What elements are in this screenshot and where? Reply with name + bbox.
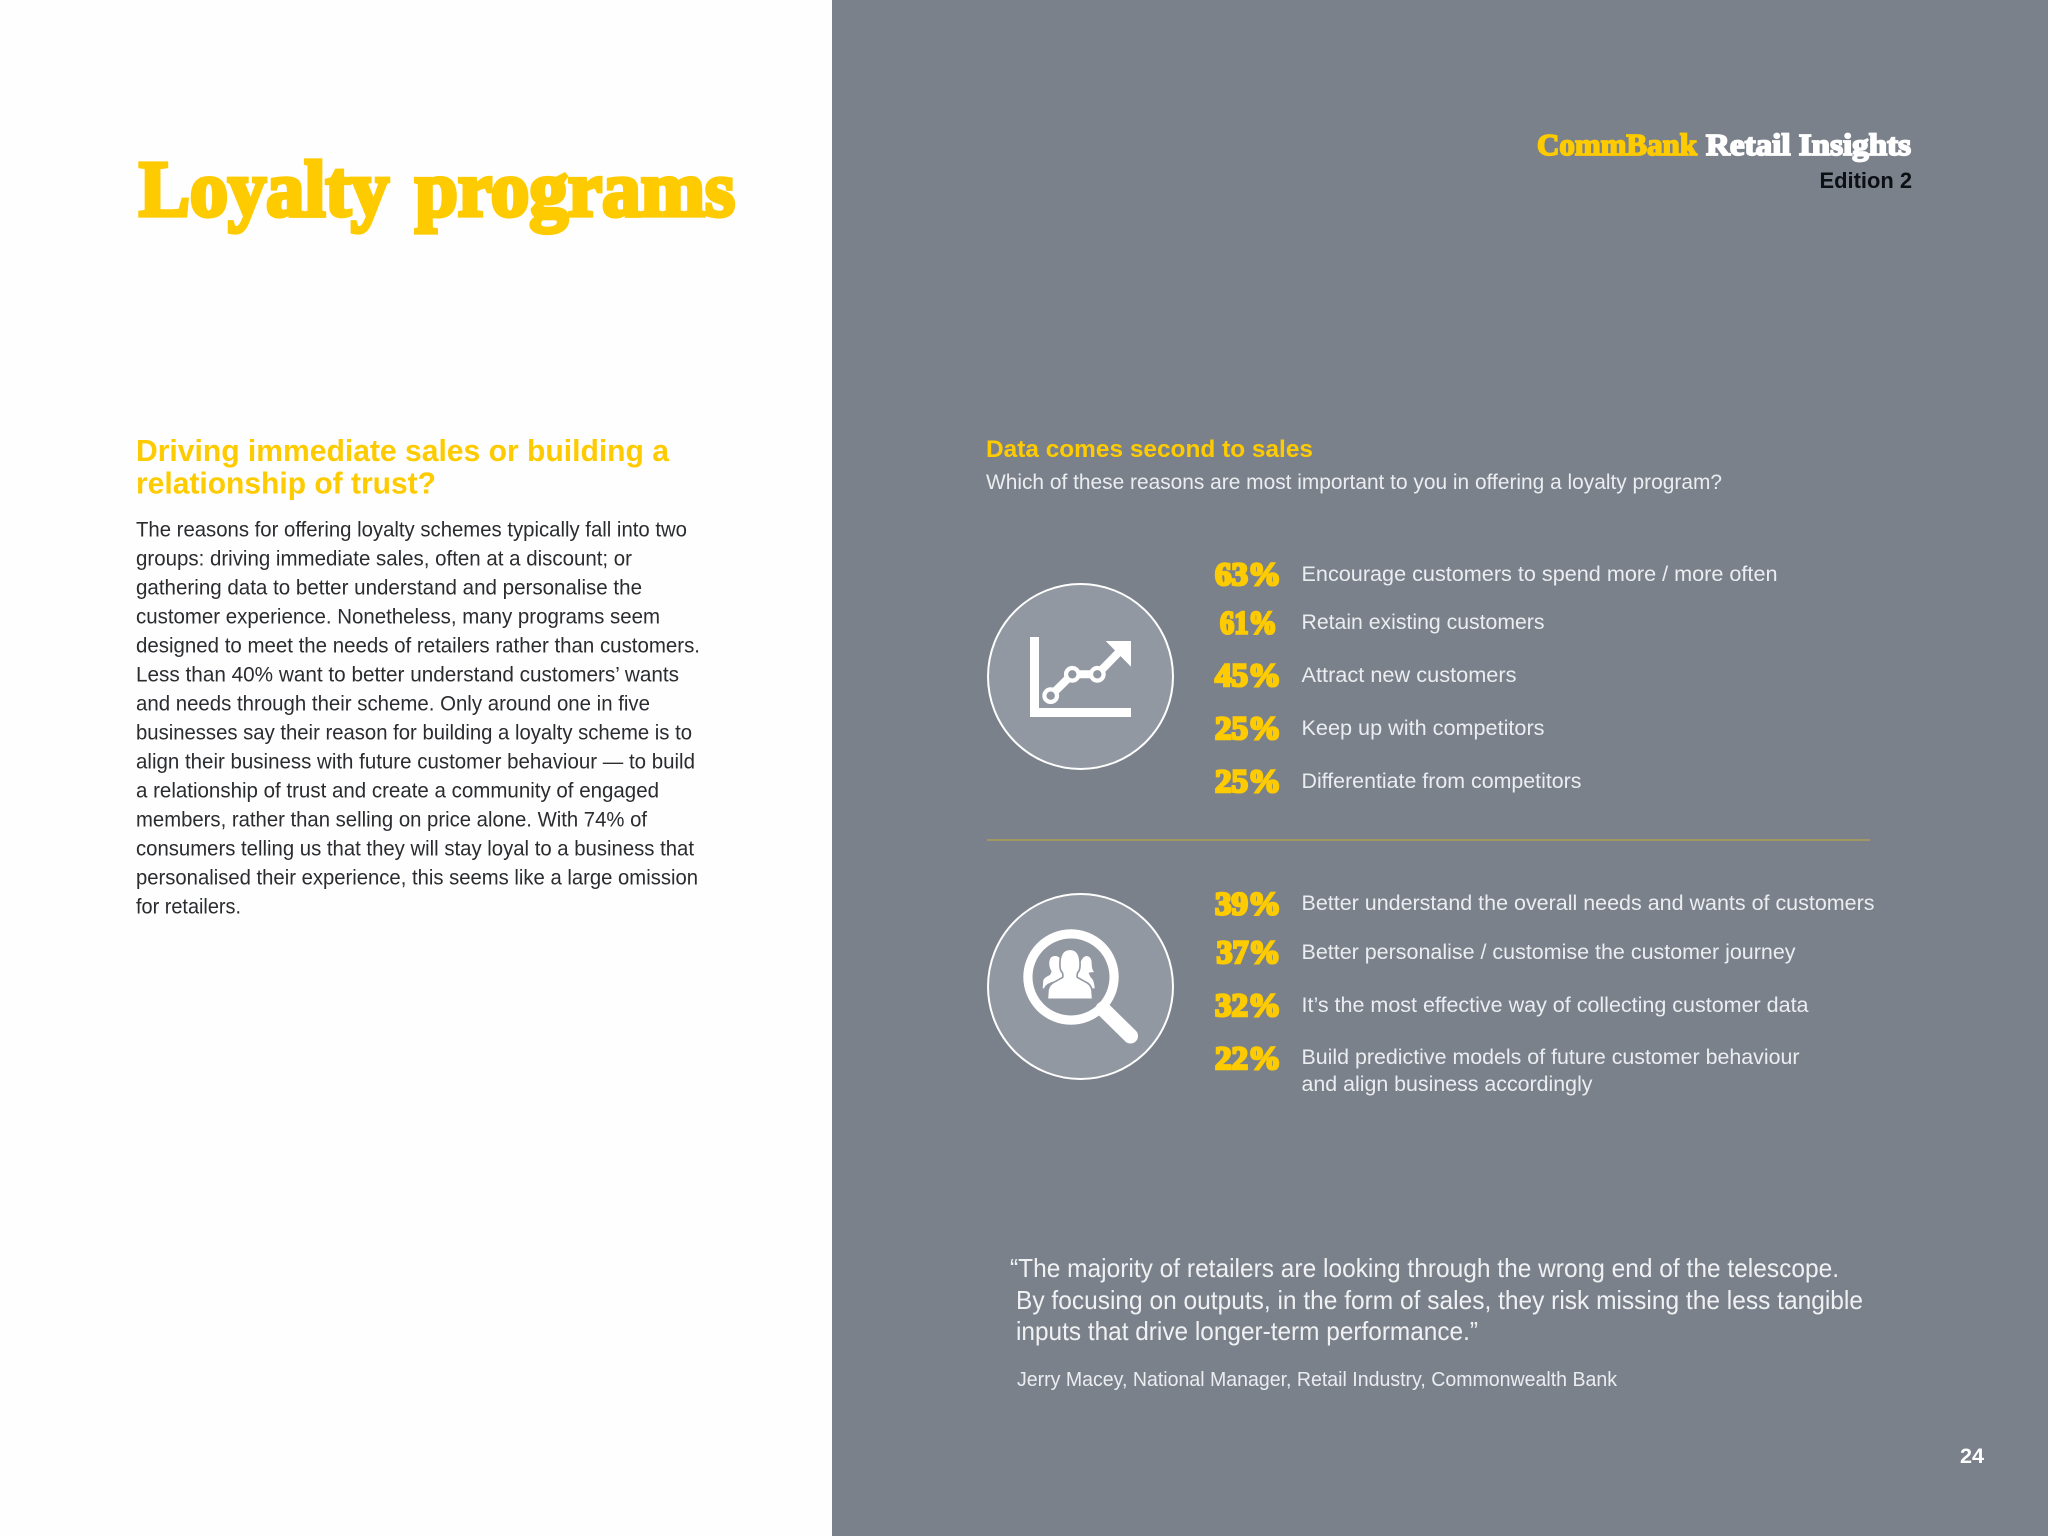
chart question: Which of these reasons are most important to you in offering a loyalty program? bbox=[986, 470, 1722, 494]
publication header bbox=[1537, 127, 1912, 193]
stats: sales-focused reasons: Encourage customers to spend more / more often bbox=[1302, 562, 1778, 586]
stats: data-focused reasons: 32% bbox=[1215, 988, 1281, 1024]
pull quote: inputs that drive longer-term performance.” bbox=[1016, 1316, 1478, 1346]
stats: sales-focused reasons: 45% bbox=[1215, 658, 1281, 694]
article body text: and needs through their scheme. Only around one in five bbox=[136, 691, 650, 715]
stats: data-focused reasons bbox=[1215, 886, 1874, 1096]
pull quote: “The majority of retailers are looking through the wrong end of the telescope. bbox=[1010, 1253, 1839, 1283]
article body text: align their business with future customer behaviour — to build bbox=[136, 749, 695, 773]
publication header: CommBank bbox=[1537, 127, 1698, 162]
stats: sales-focused reasons: Differentiate from competitors bbox=[1302, 769, 1582, 793]
stats: sales-focused reasons: 61% bbox=[1220, 606, 1277, 642]
article body text: gathering data to better understand and personalise the bbox=[136, 575, 642, 599]
icon: magnifier over people in circle bbox=[988, 894, 1173, 1079]
panel: right survey results bbox=[832, 0, 2048, 1536]
stats: sales-focused reasons: 63% bbox=[1215, 557, 1281, 593]
article heading bbox=[136, 434, 670, 500]
stats: sales-focused reasons: 25% bbox=[1215, 711, 1281, 747]
publication header: Edition 2 bbox=[1820, 168, 1912, 193]
panel: left article bbox=[0, 0, 832, 1536]
title: Loyalty bbox=[139, 146, 389, 234]
publication header: Retail Insights bbox=[1706, 127, 1911, 162]
title: programs bbox=[415, 146, 735, 234]
article body text bbox=[136, 517, 700, 918]
article body text: groups: driving immediate sales, often at a discount; or bbox=[136, 546, 632, 570]
article body text: businesses say their reason for building a loyalty scheme is to bbox=[136, 720, 692, 744]
article body text: for retailers. bbox=[136, 894, 241, 918]
stats: sales-focused reasons: Retain existing customers bbox=[1302, 610, 1544, 634]
article body text: consumers telling us that they will stay loyal to a business that bbox=[136, 836, 694, 860]
stats: data-focused reasons: Better understand the overall needs and wants of customers bbox=[1302, 891, 1874, 915]
chart heading: Data comes second to sales bbox=[986, 436, 1313, 463]
icon: growth chart in circle bbox=[988, 584, 1173, 769]
stats: sales-focused reasons bbox=[1215, 557, 1778, 800]
article heading: Driving immediate sales or building a bbox=[136, 434, 670, 468]
article body text: Less than 40% want to better understand customers’ wants bbox=[136, 662, 679, 686]
pull quote: By focusing on outputs, in the form of sales, they risk missing the less tangible bbox=[1016, 1285, 1863, 1315]
stats: sales-focused reasons: 25% bbox=[1215, 764, 1281, 800]
quote attribution: Jerry Macey, National Manager, Retail Industry, Commonwealth Bank bbox=[1017, 1368, 1618, 1391]
stats: data-focused reasons: 39% bbox=[1215, 886, 1281, 922]
stats: data-focused reasons: Better personalise / customise the customer journey bbox=[1302, 940, 1796, 964]
stats: data-focused reasons: It’s the most effective way of collecting customer data bbox=[1302, 993, 1809, 1017]
pull quote bbox=[1010, 1253, 1863, 1346]
article body text: customer experience. Nonetheless, many programs seem bbox=[136, 604, 660, 628]
page number: 24 bbox=[1960, 1445, 1984, 1468]
stats: data-focused reasons: 22% bbox=[1215, 1041, 1281, 1077]
stats: data-focused reasons: and align business accordingly bbox=[1302, 1072, 1593, 1096]
article body text: designed to meet the needs of retailers rather than customers. bbox=[136, 633, 700, 657]
stats: data-focused reasons: 37% bbox=[1216, 935, 1280, 971]
article body text: a relationship of trust and create a community of engaged bbox=[136, 778, 659, 802]
article body text: members, rather than selling on price alone. With 74% of bbox=[136, 807, 647, 831]
stats: data-focused reasons: Build predictive models of future customer behaviour bbox=[1302, 1045, 1800, 1069]
article body text: The reasons for offering loyalty schemes typically fall into two bbox=[136, 517, 687, 541]
stats: sales-focused reasons: Attract new customers bbox=[1302, 663, 1516, 687]
stats: sales-focused reasons: Keep up with competitors bbox=[1302, 716, 1544, 740]
article body text: personalised their experience, this seems like a large omission bbox=[136, 865, 698, 889]
title bbox=[139, 146, 735, 234]
article heading: relationship of trust? bbox=[136, 466, 436, 500]
